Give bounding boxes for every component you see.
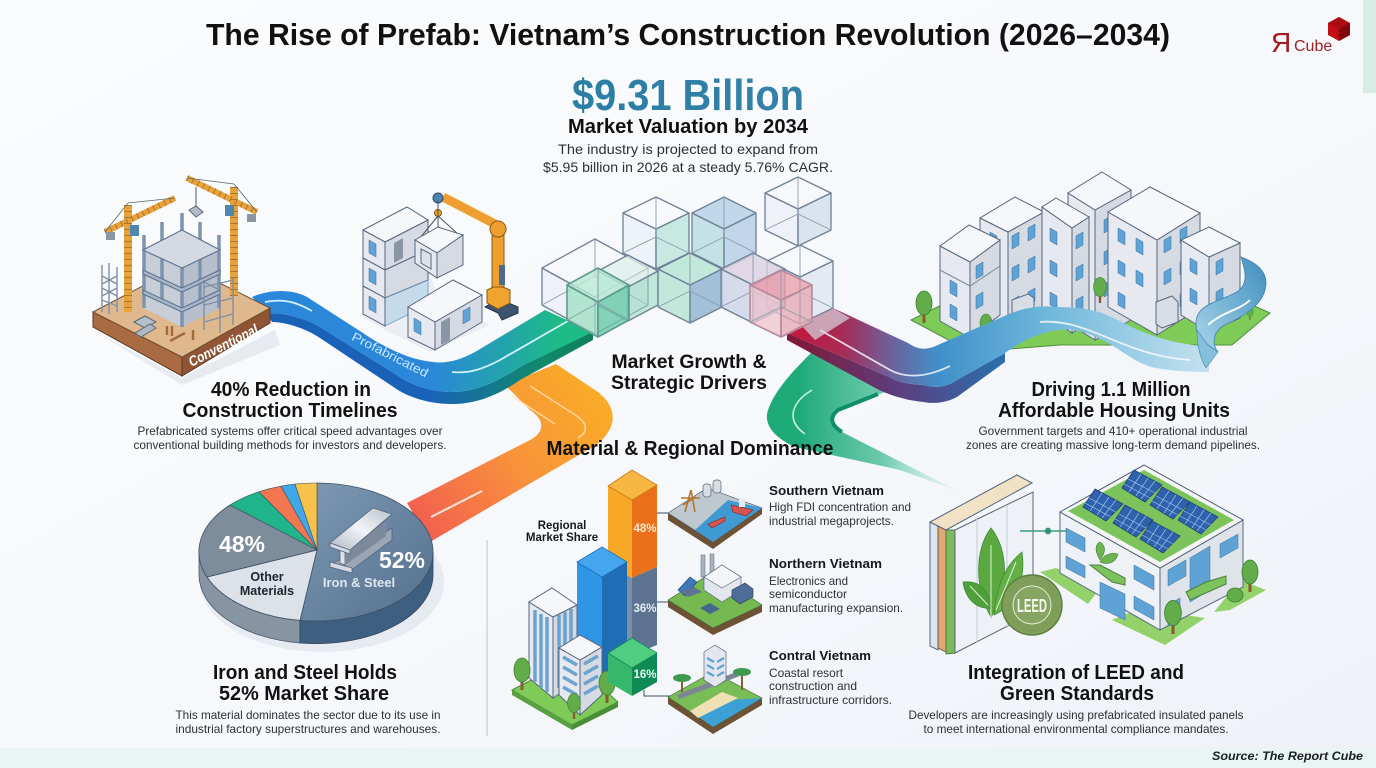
badge: LEED: LEED [1017,596,1047,616]
source: Source: The Report Cube [1212,749,1363,763]
chart: regional market share: Market Share [526,532,598,544]
bar: northern 36% [577,547,657,678]
cube: center [658,253,722,323]
connector line [1020,528,1067,534]
region: central vietnam [668,645,892,734]
heading: market growth: Strategic Drivers [611,373,767,394]
label: Profabricated: Profabricated [349,330,431,380]
region: central vietnam: Coastal resort [769,666,844,680]
buildings at bar base [514,588,615,719]
pie chart: materials: Other [250,570,284,584]
region: central vietnam: infrastructure corridors. [769,693,892,707]
region: southern vietnam: industrial megaprojects. [769,514,894,528]
text: LEED: Integration of LEED and [968,662,1184,684]
logo: RCube: Cube [1294,38,1332,55]
text: iron and steel: industrial factory superstructures and warehouses. [176,722,440,736]
text: timelines: 40% Reduction in [211,379,371,401]
badge: LEED [1002,575,1062,635]
icon: leaves [963,528,1023,617]
region: central vietnam: Contral Vietnam [769,648,871,663]
cube: upper middle [623,197,689,269]
headline stat: The industry is projected to expand from [558,141,818,157]
pie chart: materials [199,483,444,652]
bar: southern 48% [608,470,657,655]
headline stat: Market Valuation by 2034 [568,116,809,138]
region: northern vietnam: Northern Vietnam [769,556,882,571]
cube: top right [765,177,831,246]
illustration: LEED green building [930,465,1266,654]
cube: far left [542,239,648,334]
region: southern vietnam: High FDI concentration and [769,500,911,514]
text: timelines: conventional building methods for investors and developers. [134,438,446,452]
text: timelines: Construction Timelines [182,400,398,422]
text: housing: Government targets and 410+ operational industrial [978,424,1248,438]
ribbon: growth to housing [787,257,1266,403]
icon: steel I-beam [330,508,392,573]
text: housing: zones are creating massive long-term demand pipelines. [966,438,1260,452]
ribbon: orange to pie [407,364,613,542]
cube: upper blue [692,197,756,269]
map tile: southern [668,480,762,549]
text: iron and steel: Iron and Steel Holds [213,662,397,684]
illustration: housing complex [911,172,1270,352]
region: central vietnam: construction and [769,679,857,693]
pie chart: materials: Iron & Steel [323,575,395,590]
headline stat: $9.31 Billion [572,71,804,120]
heading: material and regional dominance: Material & Regional Dominance [546,438,834,460]
chart: regional market share: Regional [538,520,586,532]
region: northern vietnam: Electronics and [769,574,848,588]
text: iron and steel: 52% Market Share [219,683,389,705]
region: northern vietnam: manufacturing expansion. [769,601,903,615]
block: front right [1181,227,1240,332]
headline stat [543,71,833,175]
region: northern vietnam [668,554,903,635]
text: housing [966,379,1260,452]
text: iron and steel [176,662,440,736]
text: LEED: to meet international environmental compliance mandates. [924,722,1228,736]
cube: lower right [767,245,833,324]
headline stat: $5.95 billion in 2026 at a steady 5.76% CAGR. [543,159,833,175]
label: Conventional: Conventional [186,320,261,370]
text: LEED: Green Standards [1000,683,1154,705]
illustration: prefabricated modules and crane [360,193,518,352]
block: front left [940,225,1000,338]
chart: regional market share [512,470,657,730]
block: fifth [1108,187,1200,335]
bar: central 16% [608,638,657,696]
bar: central 16%: 16% [633,669,657,681]
cube: front pink [750,270,812,337]
block: third [1042,198,1089,333]
heading: market growth [611,352,767,394]
bar: southern 48%: 48% [633,523,657,535]
map tile: central [668,645,762,734]
region: southern vietnam: Southern Vietnam [769,483,884,498]
ribbon: green to LEED [767,352,958,491]
cube: lavender [721,253,785,323]
cube: front green [567,268,629,337]
pie chart: materials: 52% [379,547,425,573]
illustration: glass modular cubes [542,177,850,340]
illustration: conventional site [93,178,280,385]
pie chart: materials: Materials [240,584,294,598]
text: housing: Affordable Housing Units [998,400,1230,422]
text: iron and steel: This material dominates the sector due to its use in [176,708,440,722]
text: timelines: Prefabricated systems offer critical speed advantages over [138,424,442,438]
icon: insulated panel [930,475,1033,654]
region: southern vietnam [644,480,911,696]
title: The Rise of Prefab: Vietnam’s Construction Revolution (2026–2034) [206,17,1170,52]
text: LEED [908,662,1244,736]
ribbon: conventional to prefabricated [252,291,594,404]
region: northern vietnam: semiconductor [769,587,847,601]
cube: mid teal [598,255,658,321]
bar: northern 36%: 36% [633,603,657,615]
block: second [980,197,1044,338]
block: tall centre [1068,172,1131,340]
pie chart: materials: 48% [219,531,265,557]
ribbon curl [1196,257,1266,368]
logo: RCube [1271,17,1350,58]
heading: market growth: Market Growth & [612,352,767,373]
logo: RCube: Я [1271,27,1291,58]
text: timelines [134,379,446,452]
map tile: northern [668,554,762,635]
text: LEED: Developers are increasingly using prefabricated insulated panels [908,708,1244,722]
text: housing: Driving 1.1 Million [1032,379,1190,401]
